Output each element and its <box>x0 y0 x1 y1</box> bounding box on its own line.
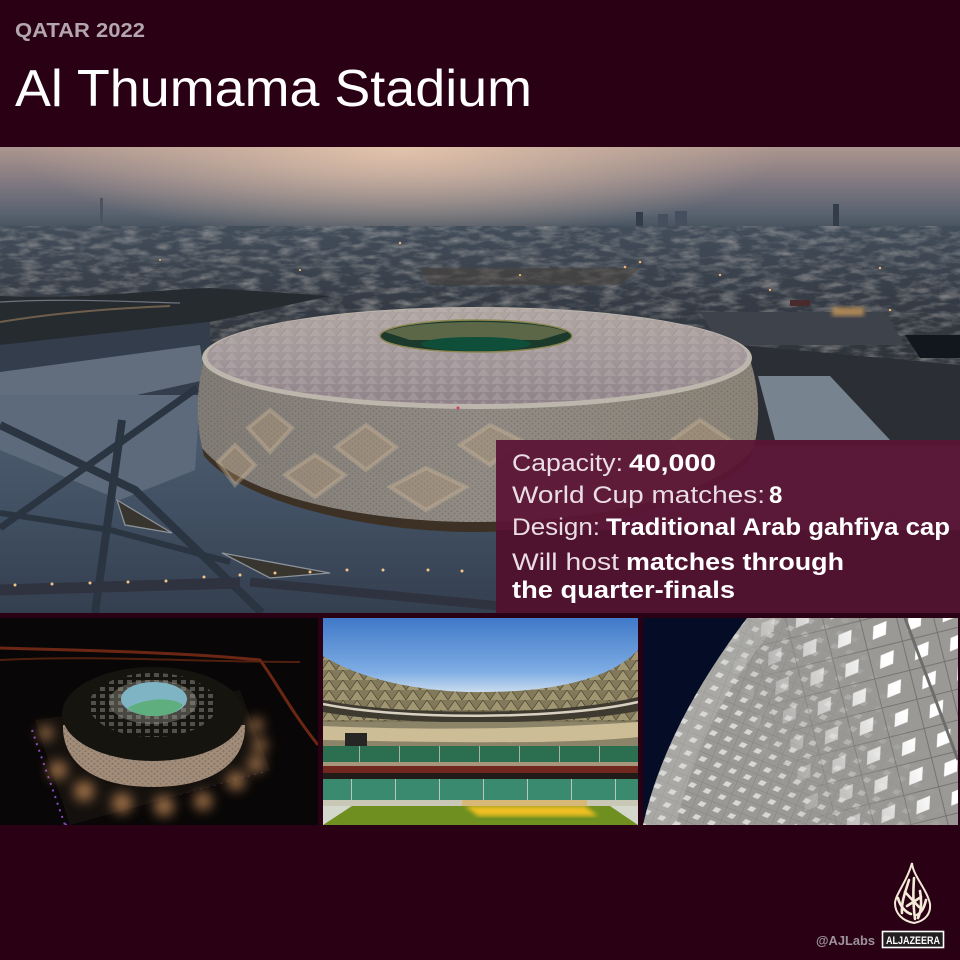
info text panel <box>512 450 950 604</box>
stat: world cup matches: 8 <box>769 482 782 509</box>
photo: stadium at night <box>0 618 318 825</box>
stat: world cup matches: World Cup matches: <box>512 482 765 509</box>
logo: Al Jazeera wordmark: ALJAZEERA <box>886 935 940 947</box>
info panel backdrop <box>496 440 960 613</box>
city <box>0 226 960 365</box>
stat: hosting <box>512 549 844 604</box>
photo: stadium interior <box>323 618 638 825</box>
photo: facade detail <box>640 615 960 830</box>
logo: Al Jazeera wordmark <box>882 932 944 948</box>
facade <box>198 360 758 532</box>
icon: Al Jazeera calligraphy logo <box>895 863 930 923</box>
stat: design: Design: <box>512 514 600 541</box>
roof opening <box>380 320 572 352</box>
kicker: Qatar 2022: QATAR 2022 <box>15 20 145 42</box>
stat: capacity: Capacity: <box>512 450 623 477</box>
stat: hosting: Will host <box>512 549 619 576</box>
stadium <box>198 307 758 532</box>
main photo: stadium at dusk <box>0 147 960 613</box>
stat: capacity <box>512 450 716 477</box>
credit: AJLabs: @AJLabs <box>816 933 875 948</box>
stat: capacity: 40,000 <box>629 450 716 477</box>
stadium wall and roof <box>62 667 245 787</box>
ground plaza <box>0 322 960 613</box>
stat: hosting: matches through <box>626 549 844 576</box>
stat: hosting: the quarter-finals <box>512 577 735 604</box>
stat: design: Traditional Arab gahfiya cap <box>606 514 950 541</box>
title: Al Thumama Stadium <box>15 60 532 118</box>
roof <box>202 307 752 409</box>
sky <box>0 147 960 229</box>
